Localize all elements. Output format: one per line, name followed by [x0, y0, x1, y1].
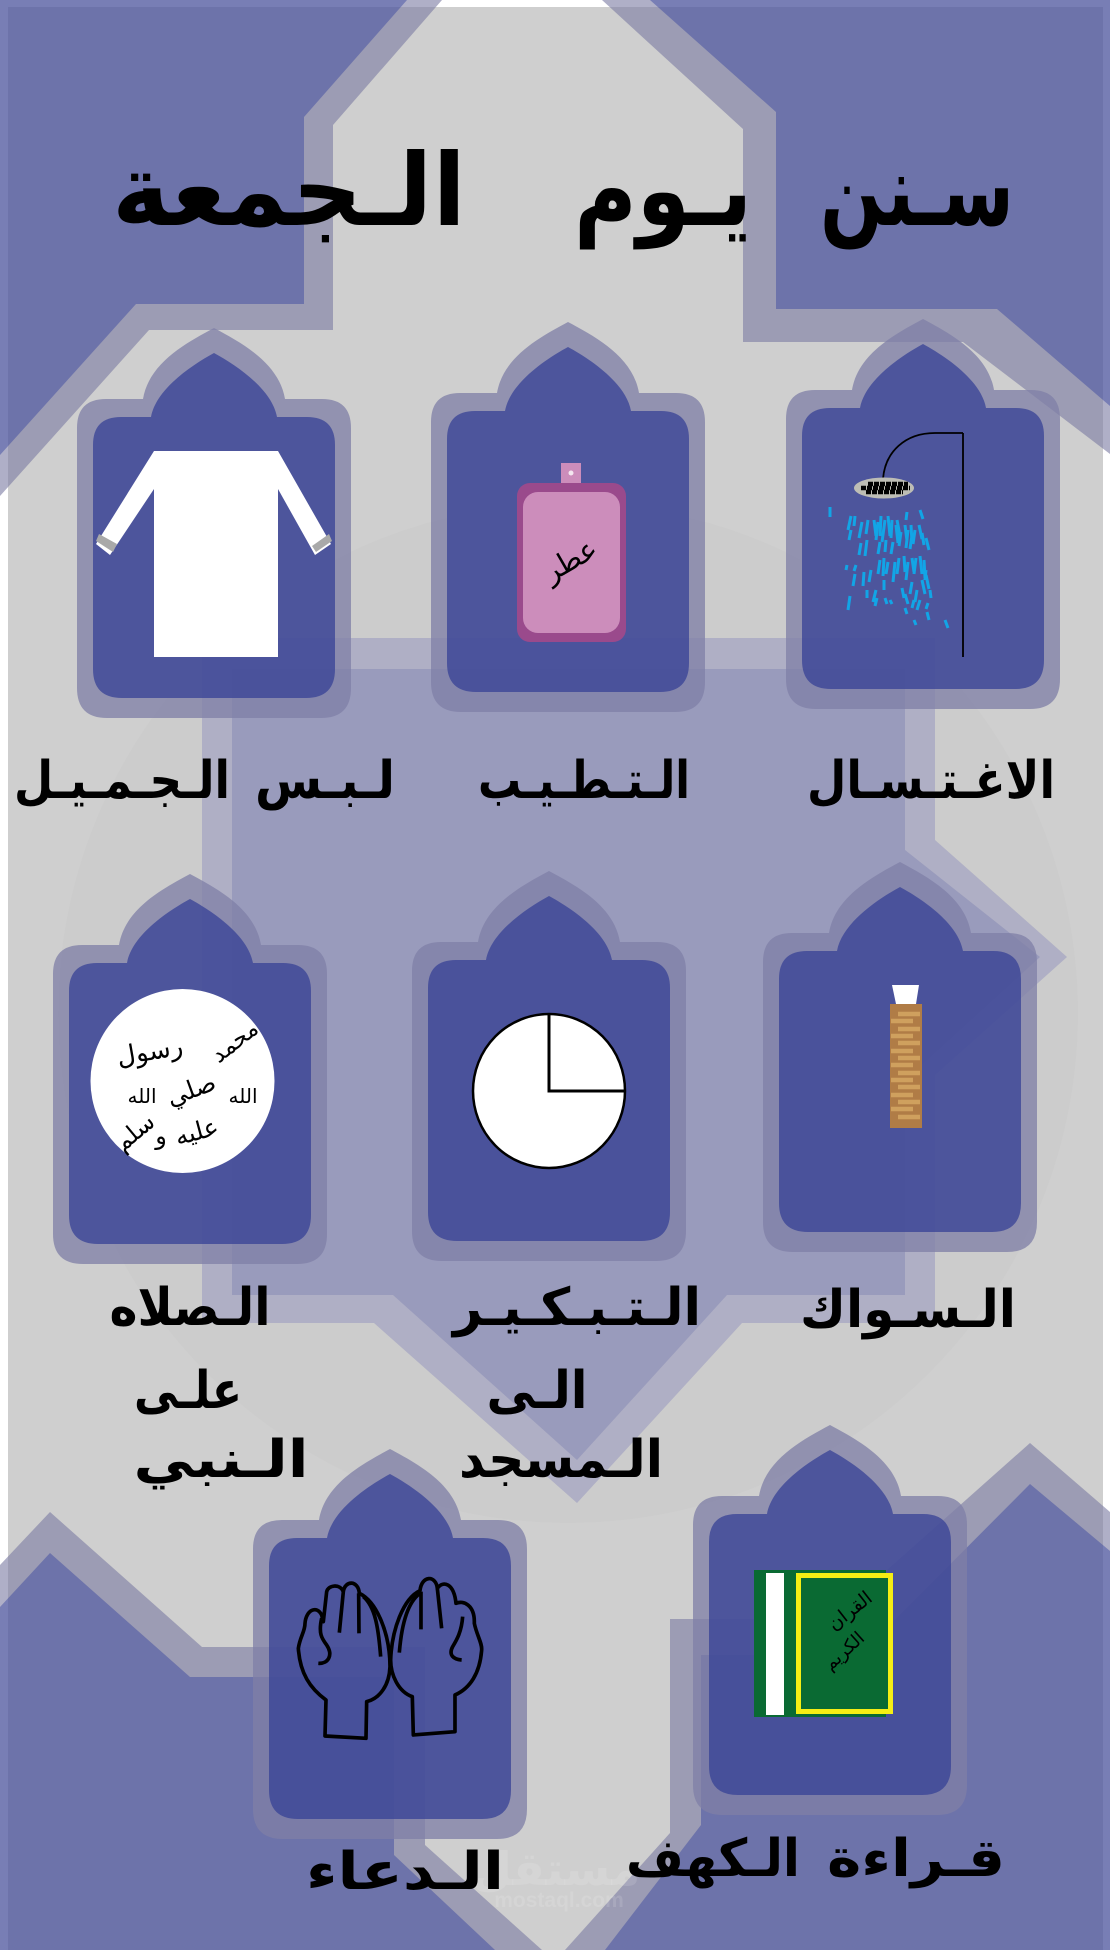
label: الصلاه على النبي: الـنبي: [134, 1430, 308, 1490]
icon: Quran book: القران: [823, 1587, 877, 1635]
icon: prayer circle with calligraphy: صلي: [163, 1067, 220, 1112]
label: الصلاه على النبي: الـصلاه: [110, 1278, 270, 1338]
icon: perfume bottle: [517, 463, 626, 642]
icon: prayer circle with calligraphy: محمد: [206, 1016, 264, 1068]
label: الصلاه على النبي: علـى: [134, 1361, 242, 1421]
icon: white thobe: [96, 451, 332, 657]
card: garment (لبس الجميل): [77, 328, 351, 718]
title: يـوم: [574, 132, 752, 250]
label: التبكير الى المسجد: الـتـبـكـيـر: [450, 1278, 701, 1338]
label: لبس الجميل: لـبـس: [255, 751, 395, 811]
icon: prayer circle with calligraphy: و: [154, 1122, 167, 1150]
icon: clock: [473, 1014, 625, 1168]
card: siwak (السواك): [763, 862, 1037, 1252]
faint background circle: [58, 503, 1078, 1523]
card: Quran (قراءة الكهف): [693, 1425, 967, 1815]
label: لبس الجميل: الـجـمـيـل: [14, 751, 230, 811]
bottom right arch shape: [565, 1443, 1110, 1950]
icon: siwak stick: [890, 985, 922, 1128]
label: قراءة الكهف: الـكهف: [626, 1829, 800, 1889]
label: التطيب: الـتـطـيـب: [478, 751, 690, 811]
label: الاغتسال: الاغـتـسـال: [807, 751, 1055, 811]
icon: prayer circle with calligraphy: رسول: [114, 1031, 185, 1073]
card: clock (التبكير الى المسجد): [412, 871, 686, 1261]
label: قراءة الكهف: [626, 1829, 1005, 1889]
icon: prayer circle with calligraphy: الله: [228, 1084, 258, 1108]
label: الدعاء: الـدعاء: [306, 1842, 504, 1902]
label: الصلاه على النبي: [110, 1278, 308, 1490]
icon: perfume bottle: عطر: [535, 531, 603, 590]
label: التبكير الى المسجد: الـمسجد: [459, 1430, 663, 1490]
card: shower (الاغتسال): [786, 319, 1060, 709]
icon: shower: [830, 433, 963, 657]
icon: raised hands: [298, 1579, 482, 1738]
icon: prayer circle with calligraphy: عليه: [172, 1112, 222, 1151]
icon: prayer circle with calligraphy: الله: [128, 1084, 156, 1108]
centre star shape: [202, 638, 1067, 1503]
watermark: mostaql.com: [494, 1889, 624, 1912]
label: التبكير الى المسجد: [450, 1278, 701, 1490]
bottom left arch shape: [0, 1512, 542, 1950]
card: supplication (الدعاء): [253, 1449, 527, 1839]
title: [112, 132, 1014, 250]
icon: Quran book: [754, 1570, 890, 1717]
card: perfume (التطيب): [431, 322, 705, 712]
label: السواك: الـسـواك: [800, 1280, 1016, 1340]
label: التبكير الى المسجد: الـى: [486, 1361, 588, 1421]
title: سـنن: [820, 132, 1014, 250]
icon: Quran book: الكريم: [820, 1628, 869, 1675]
icon: prayer circle with calligraphy: [90, 989, 274, 1173]
top left arch shape: [0, 0, 442, 496]
card: salah on the prophet (الصلاه على النبي): [53, 874, 327, 1264]
watermark: مستقل: [472, 1842, 640, 1896]
top right arch shape: [602, 0, 1110, 454]
label: قراءة الكهف: قـراءة: [827, 1829, 1005, 1889]
icon: prayer circle with calligraphy: سلم: [108, 1107, 160, 1157]
label: لبس الجميل: [14, 751, 395, 811]
title: الـجمعة: [112, 132, 466, 249]
